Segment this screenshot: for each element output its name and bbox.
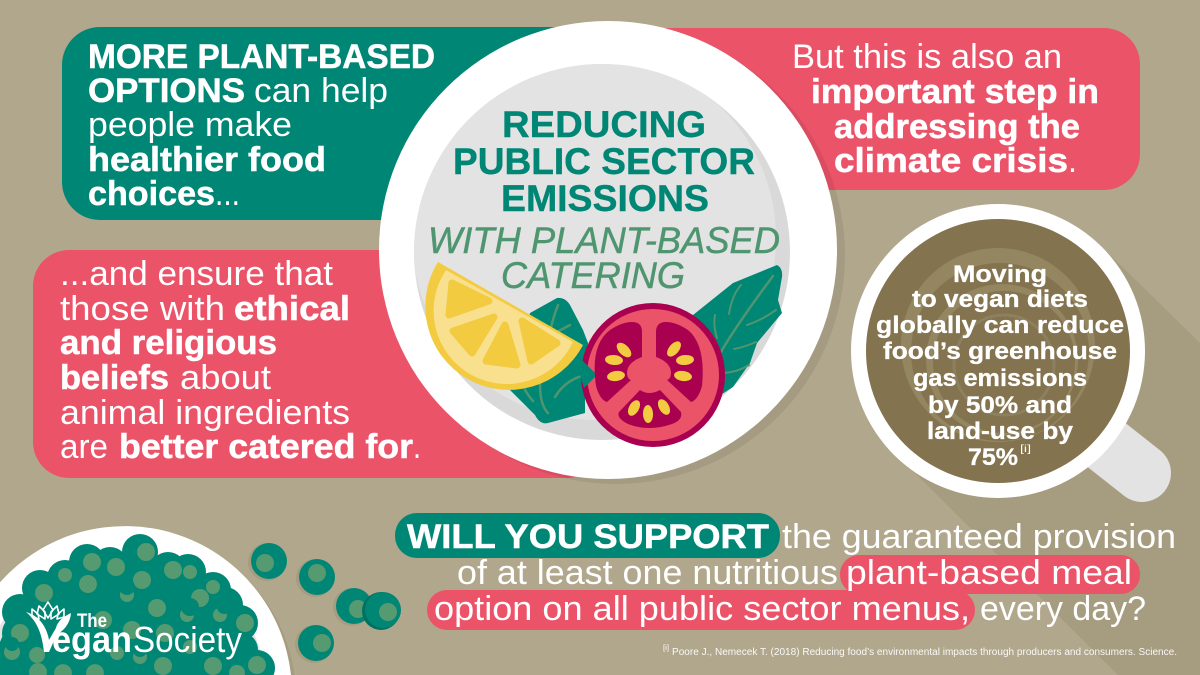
title: EMISSIONS [501, 178, 709, 219]
text: vegan diet statistic: to vegan diets [912, 286, 1088, 313]
callout: will you support: the guaranteed provision [782, 518, 1176, 556]
logo: The Vegan Society: Society [133, 619, 242, 660]
text: climate crisis message: climate crisis [834, 142, 1068, 180]
icon: loose pea 2 [296, 559, 335, 597]
icon: bowl of peas [0, 526, 294, 675]
callout: will you support [395, 513, 1176, 630]
subtitle [428, 220, 780, 296]
text: plant-based options message: OPTIONS [88, 72, 245, 110]
text: ethical and religious message: . [413, 428, 421, 466]
logo: The Vegan Society: egan [52, 619, 132, 660]
icon: loose pea 5 [295, 625, 334, 663]
text: plant-based options message: people make [88, 106, 292, 144]
logo: The Vegan Society [26, 602, 242, 660]
icon: coffee mug seen from above [851, 204, 1145, 498]
title: REDUCING [502, 104, 706, 145]
text: vegan diet statistic: 75% [968, 444, 1018, 471]
panel: climate crisis [560, 28, 1140, 190]
text: plant-based options message [88, 38, 435, 213]
text: vegan diet statistic [876, 261, 1124, 471]
text: vegan diet statistic: land-use by [927, 418, 1074, 445]
icon: loose pea 1 [248, 543, 287, 581]
title [453, 104, 755, 219]
callout: will you support: option on all public sector menus, [434, 590, 970, 628]
logo: The Vegan Society: The [77, 611, 107, 632]
text: climate crisis message: important step in [811, 73, 1099, 111]
icon: right leaf [680, 265, 782, 405]
text: ethical and religious message: ...and ensure that [60, 255, 334, 293]
text: ethical and religious message: ethical [234, 290, 350, 328]
text: plant-based options message: ... [215, 175, 240, 213]
icon: lotus flower [32, 602, 64, 619]
pill: plant-based meal [840, 555, 1140, 594]
icon: left leaf [510, 298, 597, 423]
text: ethical and religious message: animal ingredients [60, 394, 350, 432]
pill: option on all public sector menus [427, 590, 975, 630]
text: ethical and religious message: and religious [60, 324, 277, 362]
text: plant-based options message: healthier food [88, 141, 326, 179]
plate [379, 21, 845, 484]
footnote: [i] [663, 645, 669, 652]
callout: will you support: WILL YOU SUPPORT [407, 518, 769, 556]
icon: loose pea 4 [362, 592, 401, 630]
footnote: Poore J., Nemecek T. (2018) Reducing food’s environmental impacts through producers and consumers. Science. [672, 647, 1177, 658]
text: vegan diet statistic: Moving [953, 261, 1047, 288]
text: ethical and religious message [60, 255, 421, 466]
text: ethical and religious message: those with [60, 290, 225, 328]
text: plant-based options message: can help [254, 72, 388, 110]
icon: leaf V [26, 612, 71, 652]
panel: ethical and religious beliefs [33, 250, 603, 478]
pill: will you support [395, 513, 780, 558]
icon: tomato slice [580, 303, 725, 447]
text: vegan diet statistic: food’s greenhouse [883, 338, 1117, 365]
text: ethical and religious message: about [180, 359, 272, 397]
text: climate crisis message: But this is also an [792, 38, 1062, 76]
text: climate crisis message: . [1068, 142, 1077, 180]
title: PUBLIC SECTOR [453, 141, 755, 182]
callout: will you support: plant-based meal [846, 554, 1132, 592]
text: vegan diet statistic: by 50% and [928, 392, 1072, 419]
callout: will you support: of at least one nutritious [457, 554, 838, 592]
text: plant-based options message: MORE PLANT-BASED [88, 38, 435, 76]
callout: will you support: every day? [980, 590, 1146, 628]
icon: lemon slice [425, 262, 583, 390]
subtitle: CATERING [501, 255, 685, 296]
icon: loose pea 3 [333, 588, 372, 626]
text: vegan diet statistic: globally can reduce [876, 312, 1124, 339]
text: plant-based options message: choices [88, 175, 215, 213]
text: ethical and religious message: better catered for [119, 428, 413, 466]
text: vegan diet statistic: gas emissions [913, 365, 1087, 392]
text: ethical and religious message: beliefs [60, 359, 169, 397]
panel: more plant-based options [62, 27, 592, 220]
text: climate crisis message [792, 38, 1099, 180]
subtitle: WITH PLANT-BASED [428, 220, 780, 261]
text: ethical and religious message: are [60, 428, 108, 466]
text: vegan diet statistic: [i] [1020, 444, 1031, 455]
text: climate crisis message: addressing the [834, 108, 1080, 146]
